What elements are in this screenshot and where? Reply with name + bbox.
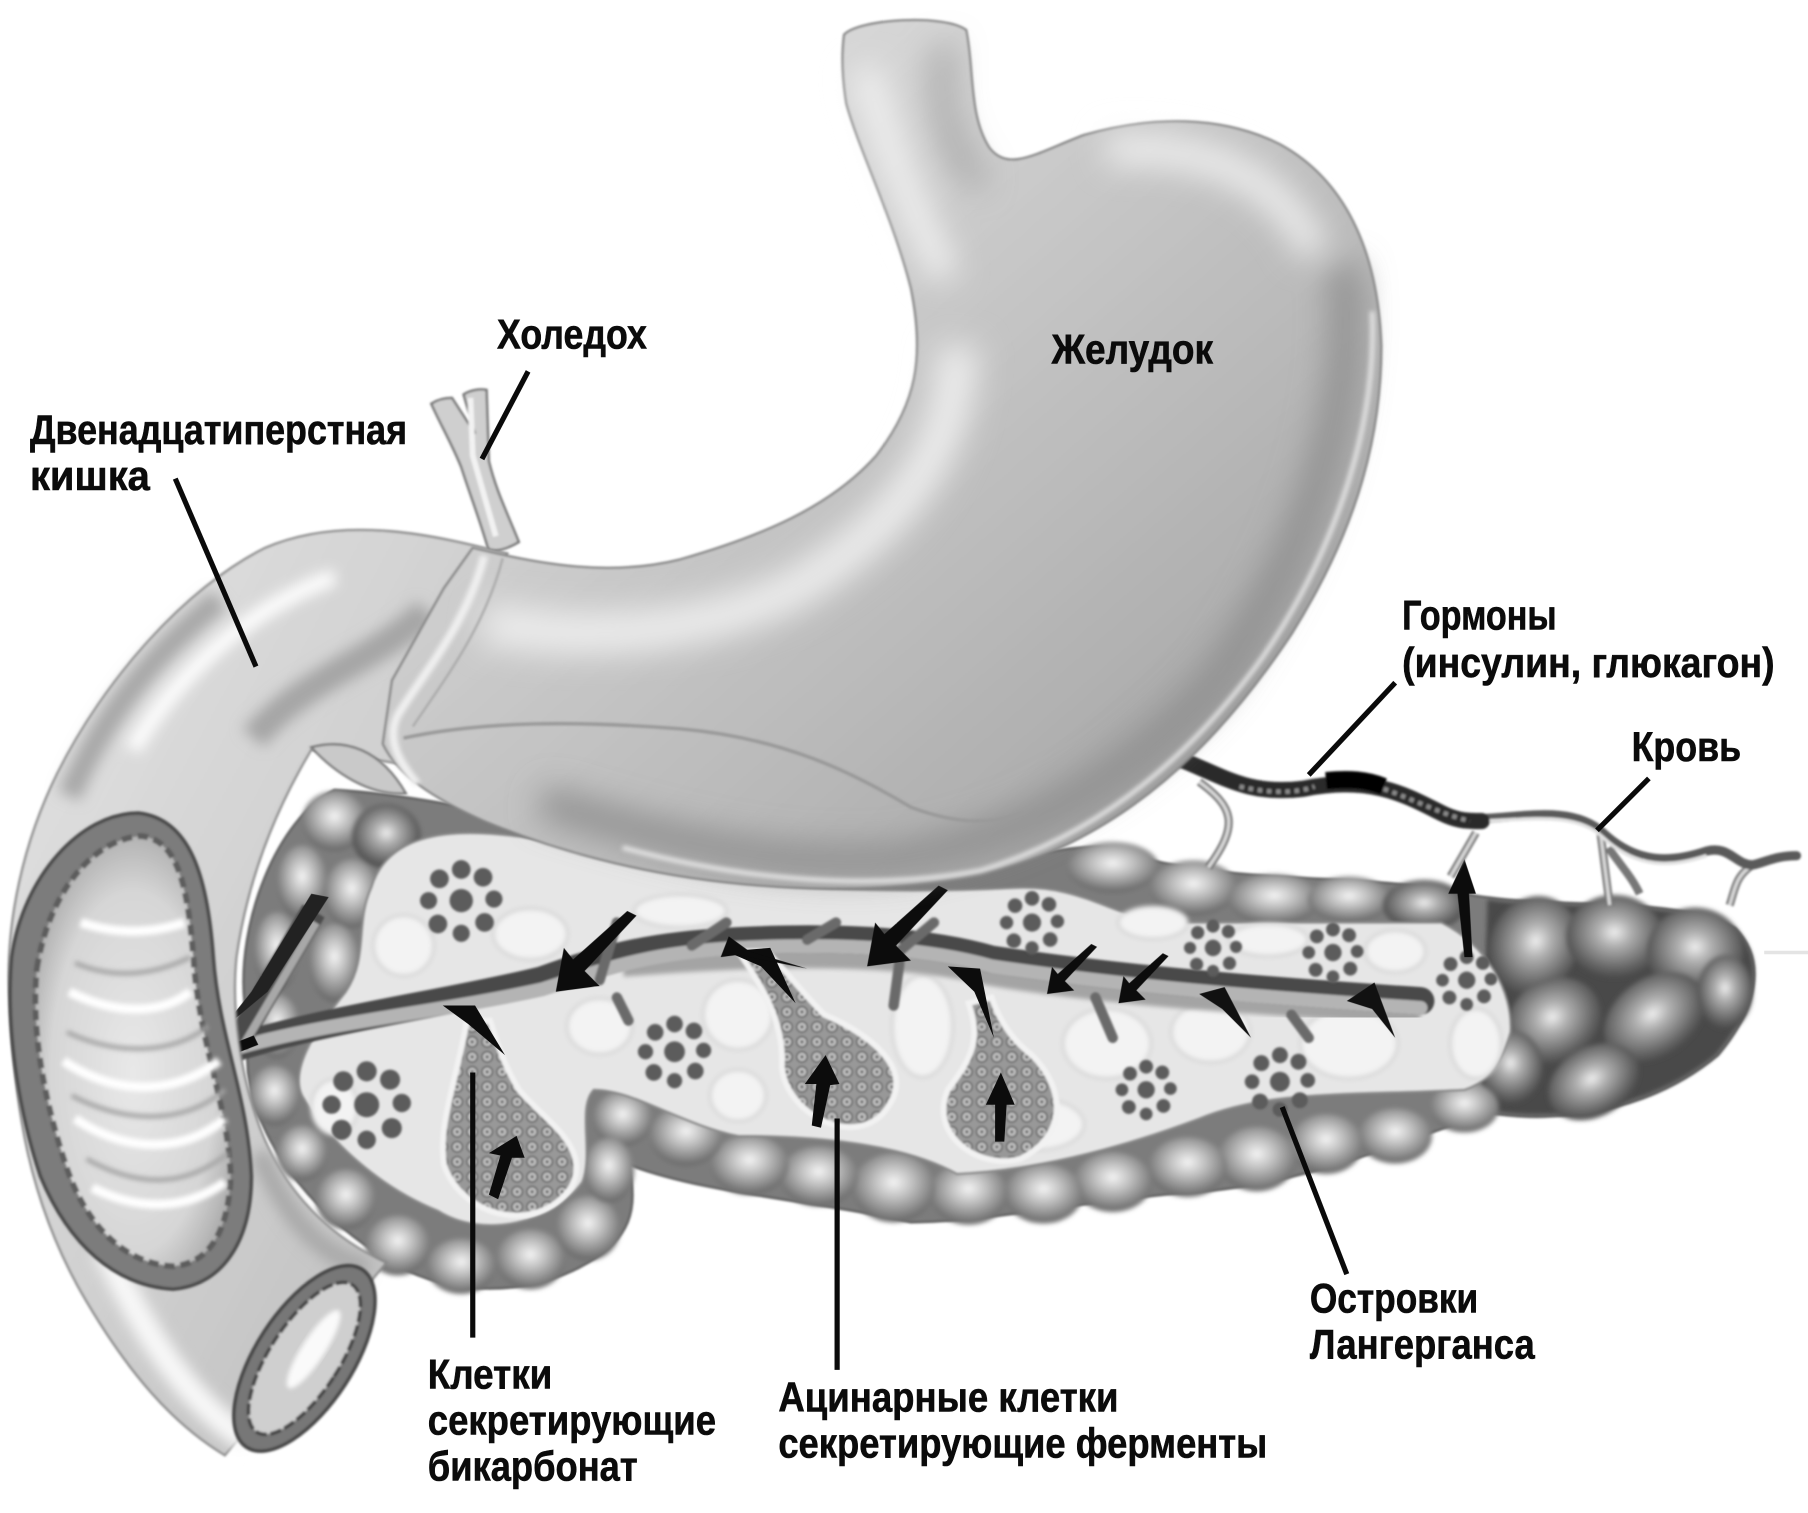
label: islets of Langerhans: Островки [1310,1274,1478,1321]
label: bicarbonate-secreting cells: Клетки [428,1350,552,1397]
leader line: hormones [1309,683,1395,775]
leader line: acinar cells [835,1119,839,1370]
leader line: common bile duct [482,371,528,459]
label: hormones: (инсулин, глюкагон) [1402,639,1775,686]
dark tail base [1482,899,1754,1115]
label: duodenum: кишка [30,452,151,499]
duodenum shading highlights [69,577,427,1441]
leader line: blood [1597,778,1649,830]
main pancreatic duct [213,911,1421,1055]
blood vessel with hormones [1170,755,1796,905]
acinus: enzyme cells centre [726,948,896,1128]
duodenum lumen cross-section [10,813,251,1289]
lobules: upper edge [254,791,1466,1059]
label: hormones [1402,592,1775,686]
lobules: lower edge [249,1066,1499,1294]
lobules: tail [1472,881,1753,1136]
secretion flow arrows [134,859,1476,1089]
label: islets of Langerhans: Лангерганса [1310,1320,1536,1367]
stomach shading [484,46,1346,862]
exocrine tissue, cut surface [299,833,1511,1225]
pancreas [134,790,1754,1294]
duodenum [9,530,507,1474]
label: islets of Langerhans [1310,1274,1536,1367]
label: acinar cells: секретирующие ферменты [778,1420,1267,1467]
label: bicarbonate-secreting cells: секретирующие [428,1396,716,1443]
vessel branches [1199,782,1753,905]
pyloric tuck [311,744,406,794]
tissue texture [311,895,1501,1150]
common bile duct [431,389,519,551]
label: blood: Кровь [1632,723,1741,770]
stomach fold lines [404,724,1020,821]
label: acinar cells [778,1373,1267,1467]
islets of Langerhans [322,860,1497,1149]
acinus: enzyme cells right [944,966,1057,1161]
leader line: bicarbonate cells [471,1072,475,1338]
label: stomach: Желудок [1051,325,1213,372]
pyloric band [393,556,484,784]
label: duodenum: Двенадцатиперстная [30,406,407,453]
thick dark vessel [1170,755,1482,821]
label: hormones: Гормоны [1402,592,1557,639]
duodenum cut end [206,1243,403,1474]
dark duct channel band [623,954,1421,1011]
leader line: islets [1282,1107,1347,1274]
pancreas body outline [243,790,1754,1289]
leader line: duodenum [175,479,256,667]
stomach rim highlight [623,311,1373,881]
acinus: bicarbonate cells [443,1006,577,1215]
label: bicarbonate-secreting cells: бикарбонат [428,1443,638,1490]
thin outer vessel [1464,815,1796,865]
label: bicarbonate-secreting cells [428,1350,716,1490]
label: acinar cells: Ацинарные клетки [778,1373,1118,1420]
label: duodenum [30,406,407,499]
duodenum body [9,530,507,1455]
stomach [311,20,1381,889]
stomach body [383,20,1381,889]
label: common bile duct: Холедох [497,310,647,357]
